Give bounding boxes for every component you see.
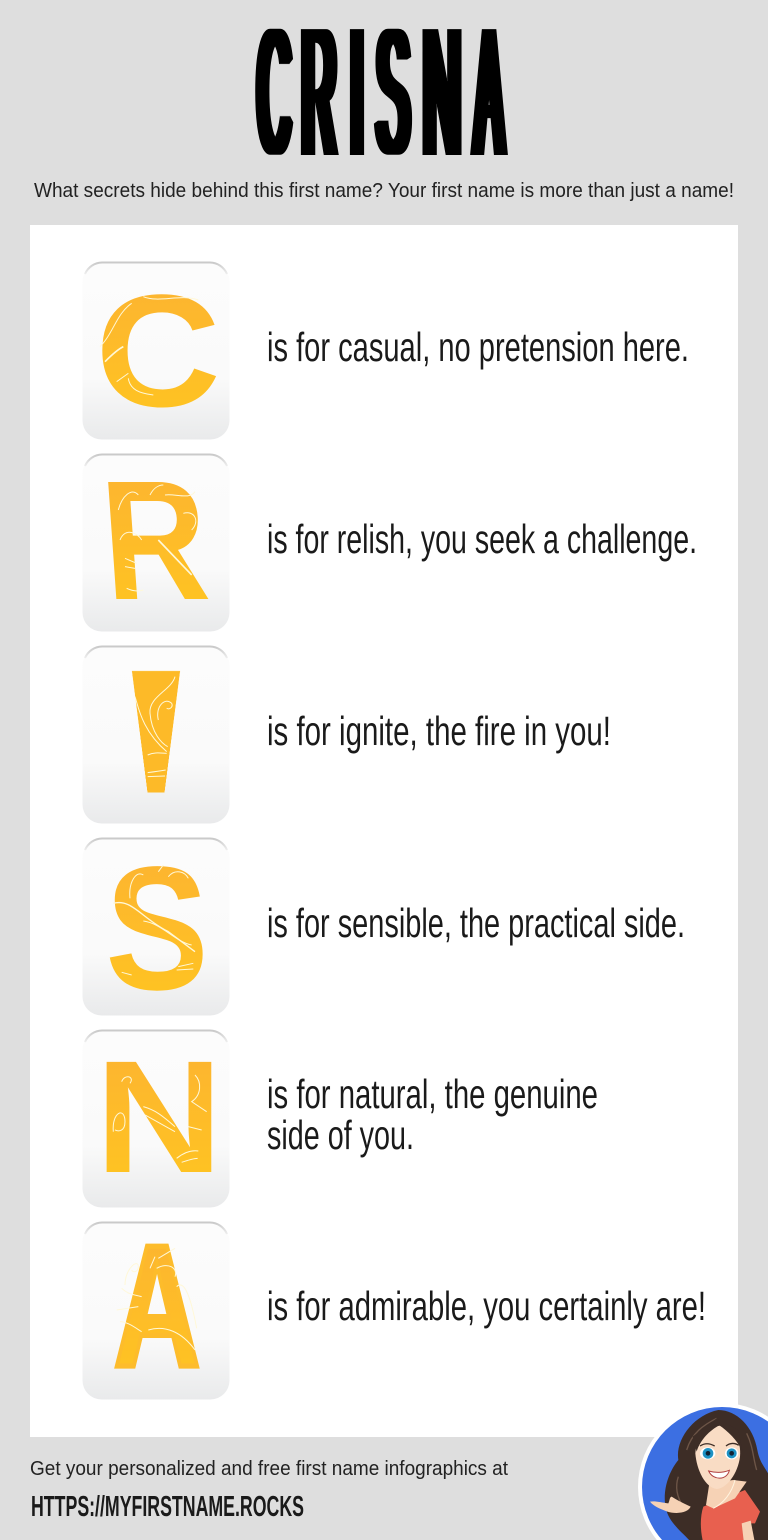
eyes — [700, 1447, 715, 1459]
hand — [650, 1497, 691, 1513]
tile: letter A — [82, 1209, 230, 1403]
text: N lines — [267, 1071, 598, 1158]
shirt — [701, 1490, 760, 1540]
text: N lines: is for natural, the genuine — [267, 1071, 598, 1117]
face — [695, 1425, 740, 1489]
subtitle: What secrets hide behind this first name? Your first name is more than just a name! — [34, 180, 734, 202]
tile: letter N: N — [95, 1027, 223, 1206]
footer url: HTTPS://MYFIRSTNAME.ROCKS — [31, 1491, 304, 1523]
necklace — [713, 1480, 735, 1508]
hair highlights — [677, 1418, 757, 1507]
mouth — [709, 1470, 729, 1478]
tile: letter C: C — [95, 262, 221, 440]
right arm — [742, 1521, 755, 1540]
eyebrows — [700, 1443, 739, 1446]
text: I line: is for ignite, the fire in you! — [267, 708, 611, 754]
footer text: Get your personalized and free first name infographics at — [30, 1458, 508, 1480]
tile: letter I — [45, 410, 267, 824]
avatar — [638, 1403, 768, 1540]
hair — [665, 1410, 768, 1540]
neck — [706, 1480, 747, 1508]
text: N lines: side of you. — [267, 1112, 414, 1158]
tile: letter A: A — [114, 1209, 200, 1403]
tile: letter S: S — [105, 831, 209, 1027]
hair fringe — [693, 1418, 743, 1452]
tile: letter R: R — [96, 445, 214, 636]
panel: white card — [30, 225, 738, 1437]
title — [258, 0, 503, 195]
text: I — [45, 410, 267, 804]
